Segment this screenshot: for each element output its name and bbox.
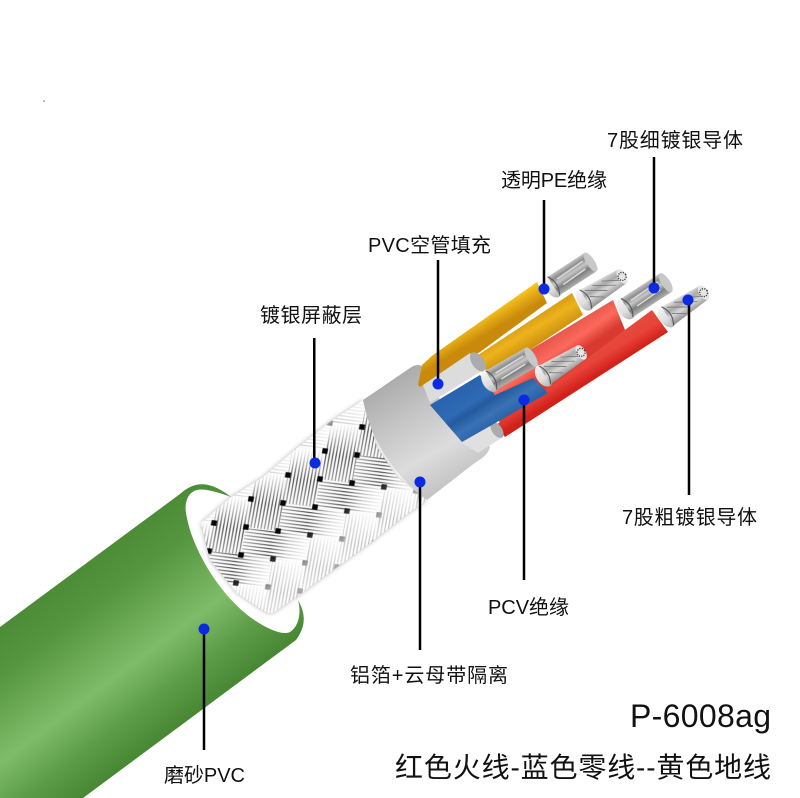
callout: 铝箔+云母带隔离: 铝箔+云母带隔离 (350, 664, 508, 687)
callout: 磨砂PVC (164, 624, 245, 787)
conductor: yellow front, thick (540, 250, 600, 301)
callout: 7股细镀银导体 (607, 129, 743, 294)
callout: PVC空管填充: PVC空管填充 (368, 234, 491, 257)
callout: 镀银屏蔽层 (260, 304, 362, 468)
silver-plated braid shield (201, 400, 427, 613)
callout: PVC空管填充 (368, 234, 491, 390)
cable illustration (0, 250, 714, 798)
yellow wire, front (418, 282, 547, 387)
blue wires (430, 375, 548, 442)
conductor: red lower, fine (654, 280, 714, 331)
conductor: yellow rear, fine (572, 264, 632, 314)
callout: PCV绝缘 (488, 394, 569, 619)
callout: 铝箔+云母带隔离 (350, 476, 508, 687)
lower filler tube (460, 420, 506, 453)
callout: PCV绝缘: PCV绝缘 (488, 596, 569, 619)
aluminium foil and mica wrap (363, 365, 490, 500)
model number: P-6008ag (630, 698, 771, 734)
tiny speck (44, 100, 45, 102)
callout: 透明PE绝缘: 透明PE绝缘 (501, 169, 607, 192)
callout: 7股粗镀银导体 (622, 294, 757, 529)
red wire, lower (496, 310, 668, 437)
callout: 透明PE绝缘 (501, 169, 607, 294)
colour code legend: 红色火线-蓝色零线--黄色地线 (395, 752, 771, 783)
callout: 镀银屏蔽层: 镀银屏蔽层 (260, 304, 362, 327)
callout: 7股细镀银导体: 7股细镀银导体 (607, 129, 743, 152)
green frosted PVC jacket (0, 484, 304, 798)
yellow wire, rear (478, 293, 583, 375)
upper filler tube (423, 350, 489, 403)
conductor: blue right, fine (531, 340, 591, 390)
callout: 磨砂PVC: 磨砂PVC (164, 764, 245, 787)
red wire, upper (490, 300, 625, 424)
conductor: blue left, thick (477, 345, 541, 395)
conductor: red upper, thick (613, 270, 676, 323)
callout: 7股粗镀银导体: 7股粗镀银导体 (622, 506, 757, 529)
